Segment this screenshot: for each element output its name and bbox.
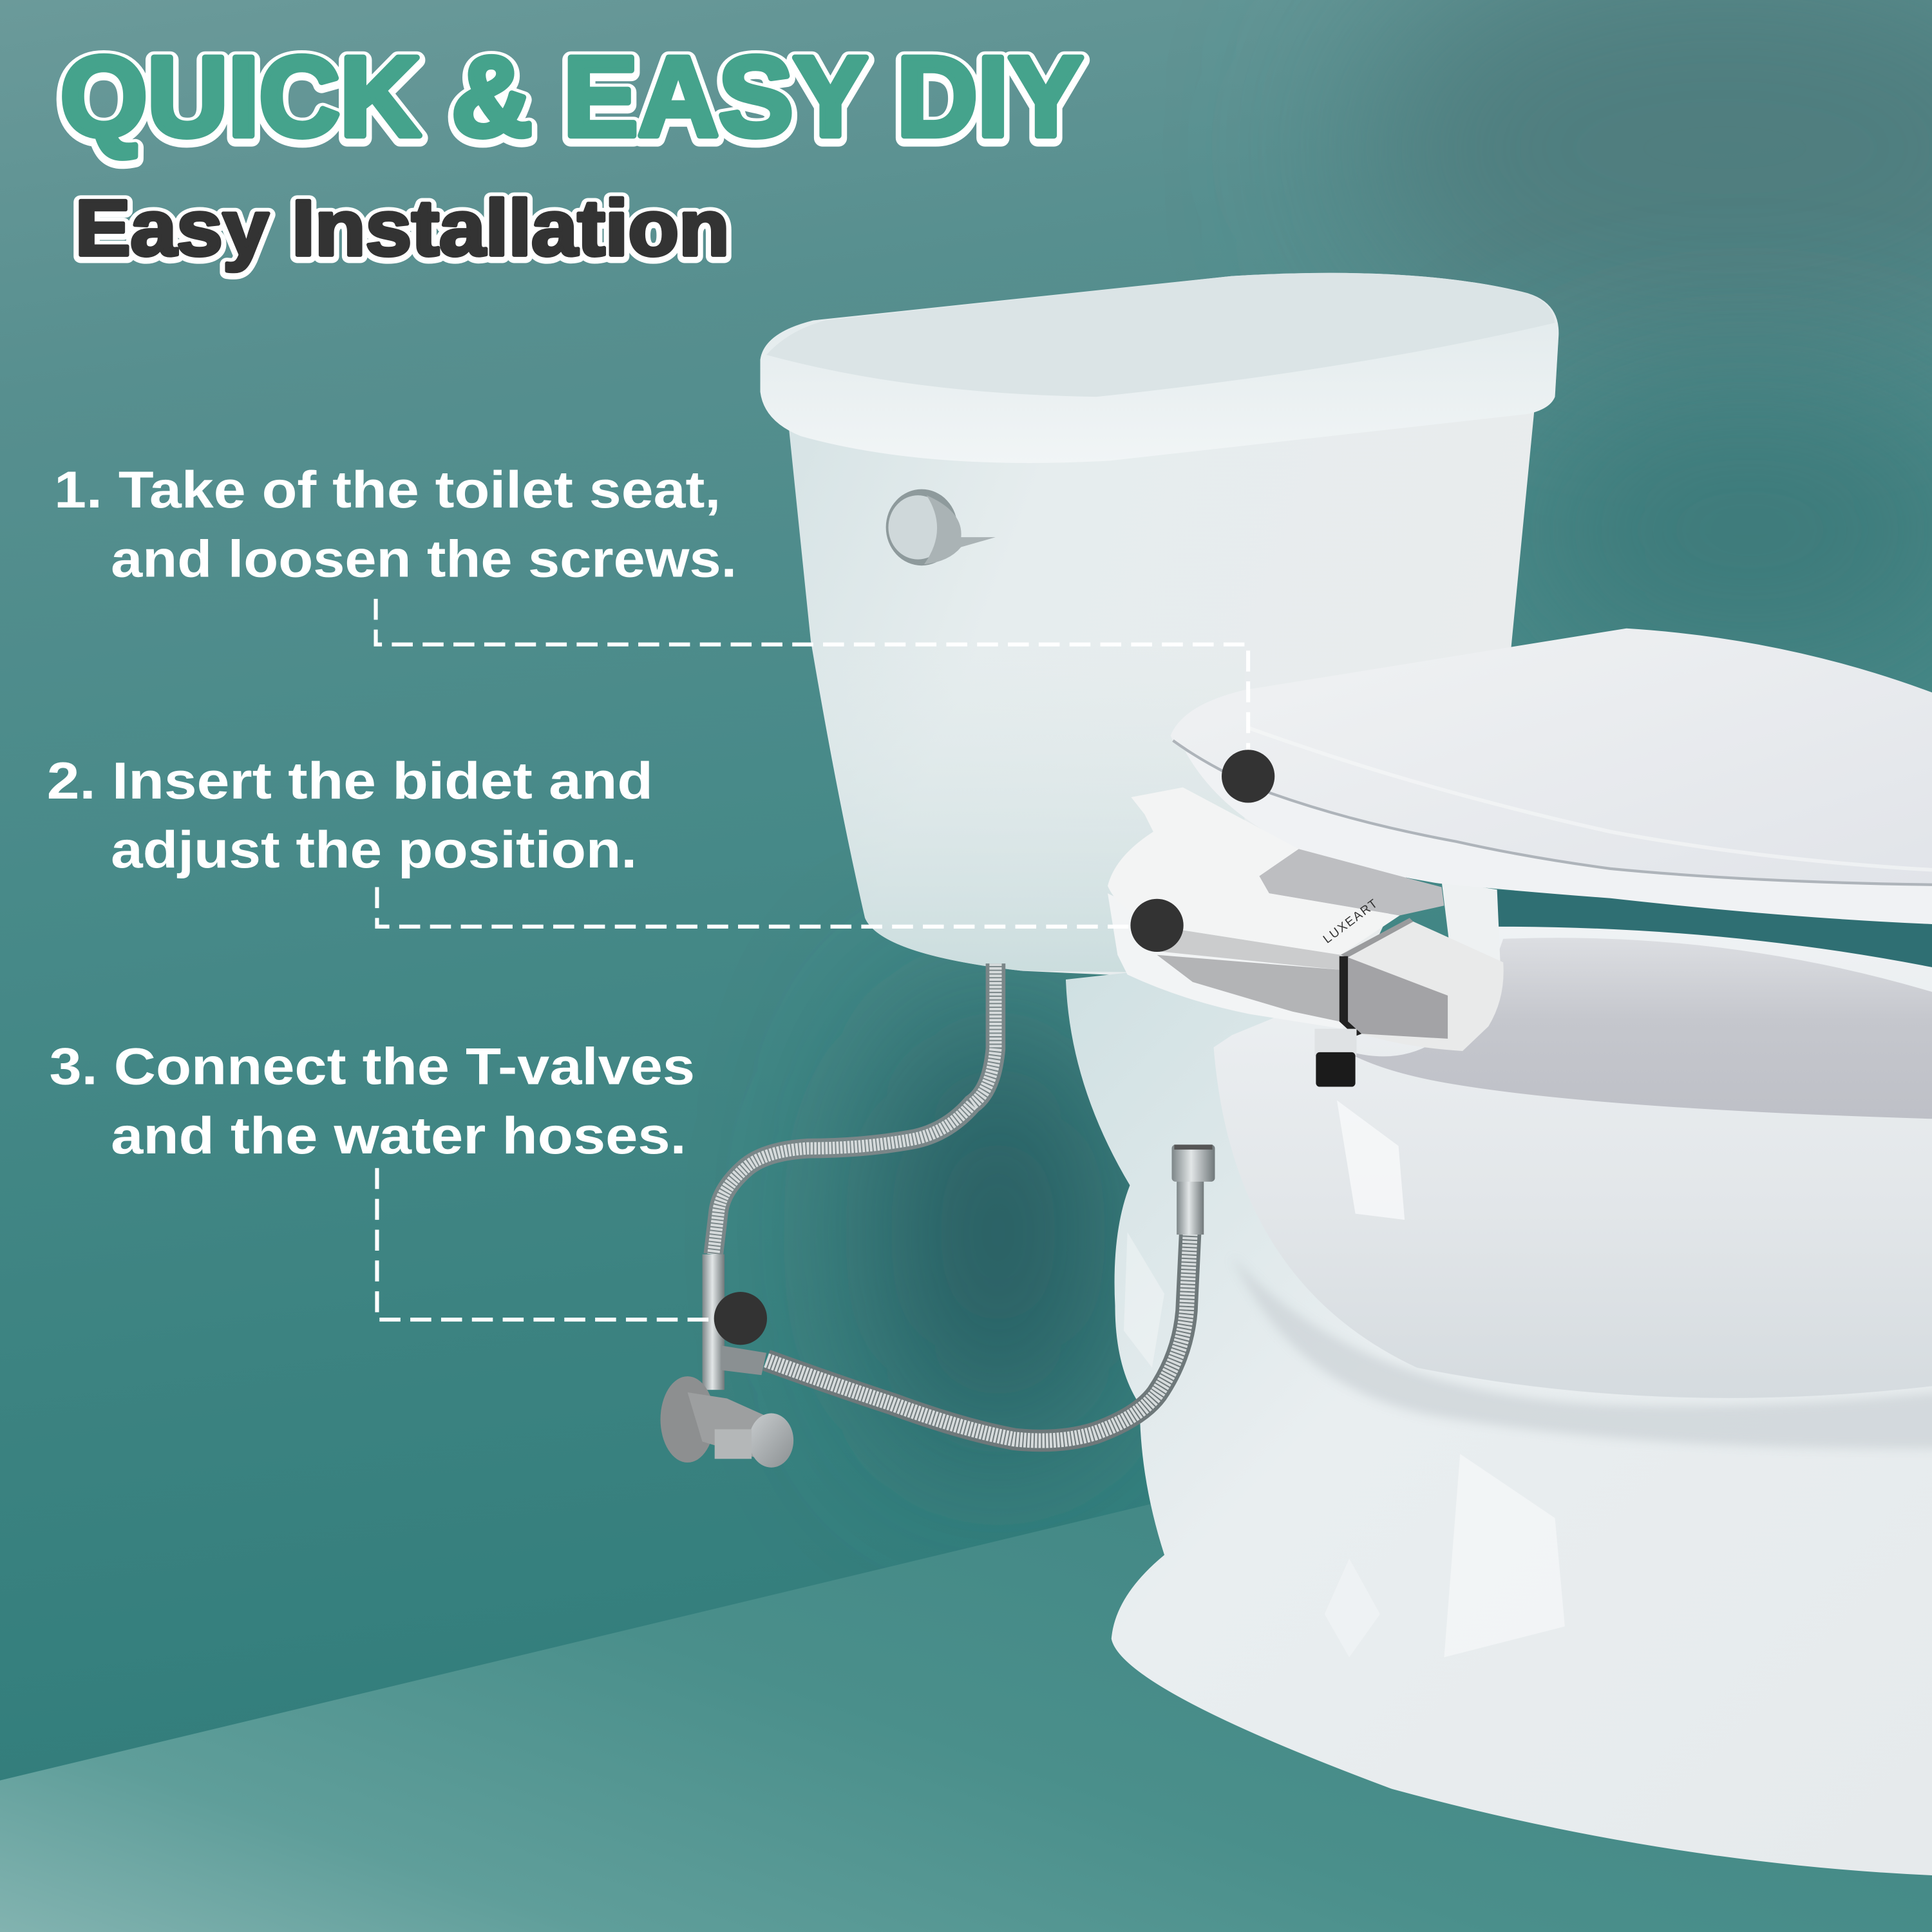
flush handle bbox=[886, 489, 996, 565]
hose end connector bbox=[1172, 1144, 1215, 1235]
title: QUICK & EASY DIY bbox=[61, 33, 1083, 160]
bowl shadow band bbox=[1232, 1257, 1932, 1448]
seat hinge support bbox=[1442, 881, 1501, 973]
angle valve bbox=[661, 1255, 793, 1468]
subtitle: Easy Installation bbox=[75, 184, 730, 272]
bowl interior bbox=[1343, 938, 1932, 1119]
callout 1 connector bbox=[376, 599, 1248, 754]
step 2 text: adjust the position. bbox=[111, 821, 637, 879]
bidet attachment bbox=[1108, 788, 1504, 1087]
brand logo: LUXEART bbox=[1321, 896, 1381, 947]
step 2 text: 2. Insert the bidet and bbox=[47, 752, 653, 810]
callout dot 1 bbox=[1222, 750, 1274, 802]
bowl pedestal and base bbox=[1066, 961, 1932, 1875]
bidet mounting plate bbox=[1108, 893, 1343, 1029]
subtitle: Easy Installation bbox=[75, 185, 730, 273]
bowl rim bbox=[1214, 927, 1932, 1398]
teal gap under seat bbox=[1497, 889, 1932, 967]
bidet head bbox=[1340, 918, 1504, 1051]
bidet side band bbox=[1157, 931, 1341, 970]
bidet opening bbox=[1259, 849, 1444, 916]
step 1 text bbox=[54, 461, 737, 588]
callout 2 connector bbox=[377, 887, 1133, 927]
seat lip bbox=[1186, 752, 1932, 924]
bidet lower body bbox=[1157, 955, 1340, 1021]
step 2 text bbox=[47, 752, 653, 879]
callout dot 3 bbox=[714, 1292, 767, 1345]
tank lid bbox=[760, 273, 1558, 463]
floor bbox=[0, 1501, 1932, 1932]
seat lid bbox=[1171, 629, 1932, 885]
step 3 text bbox=[50, 1038, 695, 1165]
callout dot 2 bbox=[1130, 899, 1184, 952]
toilet tank body bbox=[788, 401, 1535, 986]
step 1 text: 1. Take of the toilet seat, bbox=[54, 461, 721, 519]
step 1 text: and loosen the screws. bbox=[111, 530, 737, 588]
bidet connector bbox=[1314, 1029, 1357, 1087]
seat lid edge line bbox=[1173, 741, 1932, 885]
hose: upper bbox=[714, 963, 996, 1255]
hose: lower bbox=[766, 1232, 1190, 1441]
step 3 text: 3. Connect the T-valves bbox=[50, 1038, 695, 1096]
toilet bbox=[760, 273, 1932, 1875]
title: QUICK & EASY DIY bbox=[61, 36, 1083, 162]
bowl rim highlight bbox=[1337, 1101, 1405, 1220]
seat lid upper edge highlight bbox=[1249, 728, 1932, 870]
bidet top surface bbox=[1108, 788, 1399, 955]
step 3 text: and the water hoses. bbox=[111, 1107, 687, 1165]
callout 3 connector bbox=[377, 1168, 717, 1320]
base highlights bbox=[1124, 1232, 1565, 1657]
